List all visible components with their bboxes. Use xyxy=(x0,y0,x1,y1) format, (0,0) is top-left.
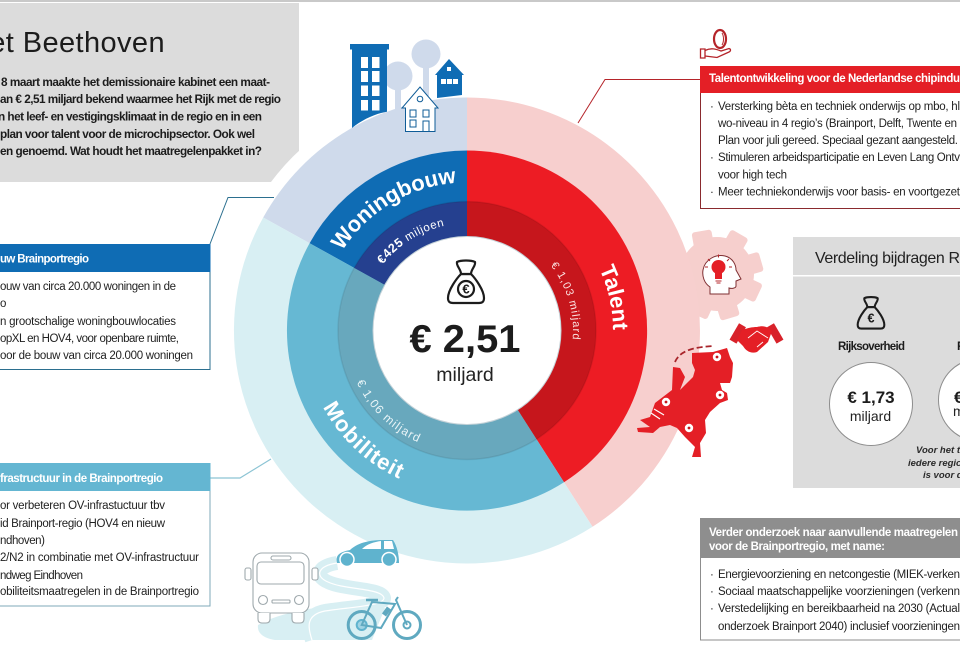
label: talent: Talent xyxy=(601,263,628,330)
bullet list: Meer techniekonderwijs voor basis- en voortgezet xyxy=(718,186,960,198)
middle ring: mobiliteit xyxy=(287,243,564,511)
intro text: en genoemd. Wat houdt het maatregelenpakket in? xyxy=(0,144,262,158)
amount: talent: € 1,03 miljard xyxy=(552,262,581,340)
icon: map of the Netherlands xyxy=(637,346,733,457)
intro text: 8 maart maakte het demissionaire kabinet een maat- xyxy=(1,75,270,89)
bullet list: voor high tech xyxy=(718,170,787,182)
middle ring: talent xyxy=(467,150,647,482)
bus xyxy=(245,553,318,623)
body text: opXL en HOV4, voor openbare ruimte, xyxy=(0,333,179,345)
icon: money bag: € xyxy=(868,312,874,326)
outer ring: woningbouw xyxy=(263,98,467,330)
heading: uw Brainportregio xyxy=(0,254,89,266)
icon: money bag xyxy=(858,297,884,329)
icon: money bag xyxy=(448,260,484,303)
label: woningbouw: Woningbouw xyxy=(330,171,455,248)
heading: Talentontwikkeling voor de Nederlandse chipindu xyxy=(709,73,960,85)
total amount: € 2,51 xyxy=(410,318,520,361)
body text: ndweg Eindhoven xyxy=(0,570,83,582)
bullet list: · xyxy=(710,186,714,198)
bullet list: · xyxy=(710,101,714,113)
circle: rijk amount xyxy=(830,362,912,446)
body text xyxy=(0,500,199,598)
label: rijksoverheid: Rijksoverheid xyxy=(838,341,905,353)
bullet list: Plan voor juli gereed. Speciaal gezant aangesteld. xyxy=(718,135,958,147)
note xyxy=(908,445,960,481)
inner ring: woningbouw xyxy=(354,202,467,330)
body text xyxy=(0,281,193,362)
bullet list: Stimuleren arbeidsparticipatie en Leven Lang Ontv xyxy=(718,152,960,164)
white halo around diagram xyxy=(221,84,713,576)
body text: or verbeteren OV-infrastuctuur tbv xyxy=(0,500,165,512)
panel: verdeling bijdragen xyxy=(793,237,960,488)
intro text: an € 2,51 miljard bekend waarmee het Rijk met de regio xyxy=(0,92,281,106)
body text: id Brainport-regio (HOV4 en nieuw xyxy=(0,518,166,530)
panel: intro xyxy=(0,3,299,182)
outer ring: mobiliteit xyxy=(234,218,592,564)
heading: frastructuur in de Brainportregio xyxy=(0,473,163,485)
icon: buildings and houses xyxy=(350,40,464,132)
body text: obiliteitsmaatregelen in de Brainportregio xyxy=(0,586,199,598)
heading xyxy=(709,527,958,553)
bullet list: Verstedelijking en bereikbaarheid na 2030 (Actual xyxy=(718,603,960,615)
circle: regio amount xyxy=(938,358,960,442)
body text: oor de bouw van circa 20.000 woningen xyxy=(0,350,193,362)
inner ring: mobiliteit xyxy=(338,268,536,459)
donut chart xyxy=(234,98,700,564)
body text: o xyxy=(0,298,6,310)
bullet list: Versterking bèta en techniek onderwijs op mbo, hl xyxy=(718,101,960,113)
amount: woningbouw: €425 miljoen xyxy=(378,220,444,263)
connector: talent xyxy=(578,80,700,123)
icon: hand with coin xyxy=(700,30,730,58)
body text: 2/N2 in combinatie met OV-infrastructuur xyxy=(0,552,199,564)
bullet list: · xyxy=(710,569,714,581)
outer ring: talent xyxy=(467,98,700,527)
car xyxy=(337,540,399,566)
panel: verder onderzoek xyxy=(700,518,960,640)
bullet list: · xyxy=(710,586,714,598)
icon: handshake xyxy=(730,323,783,353)
bullet list xyxy=(710,569,960,633)
bullet list: · xyxy=(710,152,714,164)
intro text: n het leef- en vestigingsklimaat in de regio en in een xyxy=(0,110,262,124)
body text: ndhoven) xyxy=(0,535,45,547)
label: mobiliteit: Mobiliteit xyxy=(324,400,404,478)
panel: infrastructuur brainportregio xyxy=(0,463,210,606)
intro text xyxy=(0,75,281,158)
panel: talentontwikkeling xyxy=(700,66,960,208)
body text: ouw van circa 20.000 woningen in de xyxy=(0,281,176,293)
icon: gear xyxy=(680,229,764,321)
bullet list xyxy=(710,101,960,198)
connector: woningbouw xyxy=(210,198,274,244)
icon: money bag: € xyxy=(462,282,470,296)
intro text: plan voor talent voor de microchipsector. Ook wel xyxy=(0,127,255,141)
bullet list: · xyxy=(710,603,714,615)
connector: mobiliteit xyxy=(210,459,271,478)
heading: Verdeling bijdragen R xyxy=(815,250,960,267)
bullet list: wo-niveau in 4 regio’s (Brainport, Delft, Twente en xyxy=(717,118,957,130)
icon: road, bus, car and bike xyxy=(245,540,420,640)
panel: woningbouw brainportregio xyxy=(0,244,210,370)
middle ring: woningbouw xyxy=(310,150,467,330)
total unit: miljard xyxy=(436,364,494,386)
centre circle xyxy=(373,236,561,424)
heading: Verder onderzoek naar aanvullende maatregelen xyxy=(709,527,958,539)
circle: rijk amount: miljard xyxy=(850,408,891,424)
heading: voor de Brainportregio, met name: xyxy=(709,541,885,553)
circle: rijk amount: € 1,73 xyxy=(847,388,895,407)
body text: n grootschalige woningbouwlocaties xyxy=(0,316,176,328)
inner ring: talent xyxy=(467,201,596,439)
bullet list: onderzoek Brainport 2040) inclusief voorzieningen xyxy=(718,621,960,633)
amount: mobiliteit: € 1,06 miljard xyxy=(358,380,421,442)
bullet list: Energievoorziening en netcongestie (MIEK-verken xyxy=(718,569,960,581)
icon: head with light bulb xyxy=(703,254,741,294)
bike xyxy=(348,597,420,638)
bullet list: Sociaal maatschappelijke voorzieningen (verkenn xyxy=(718,586,960,598)
